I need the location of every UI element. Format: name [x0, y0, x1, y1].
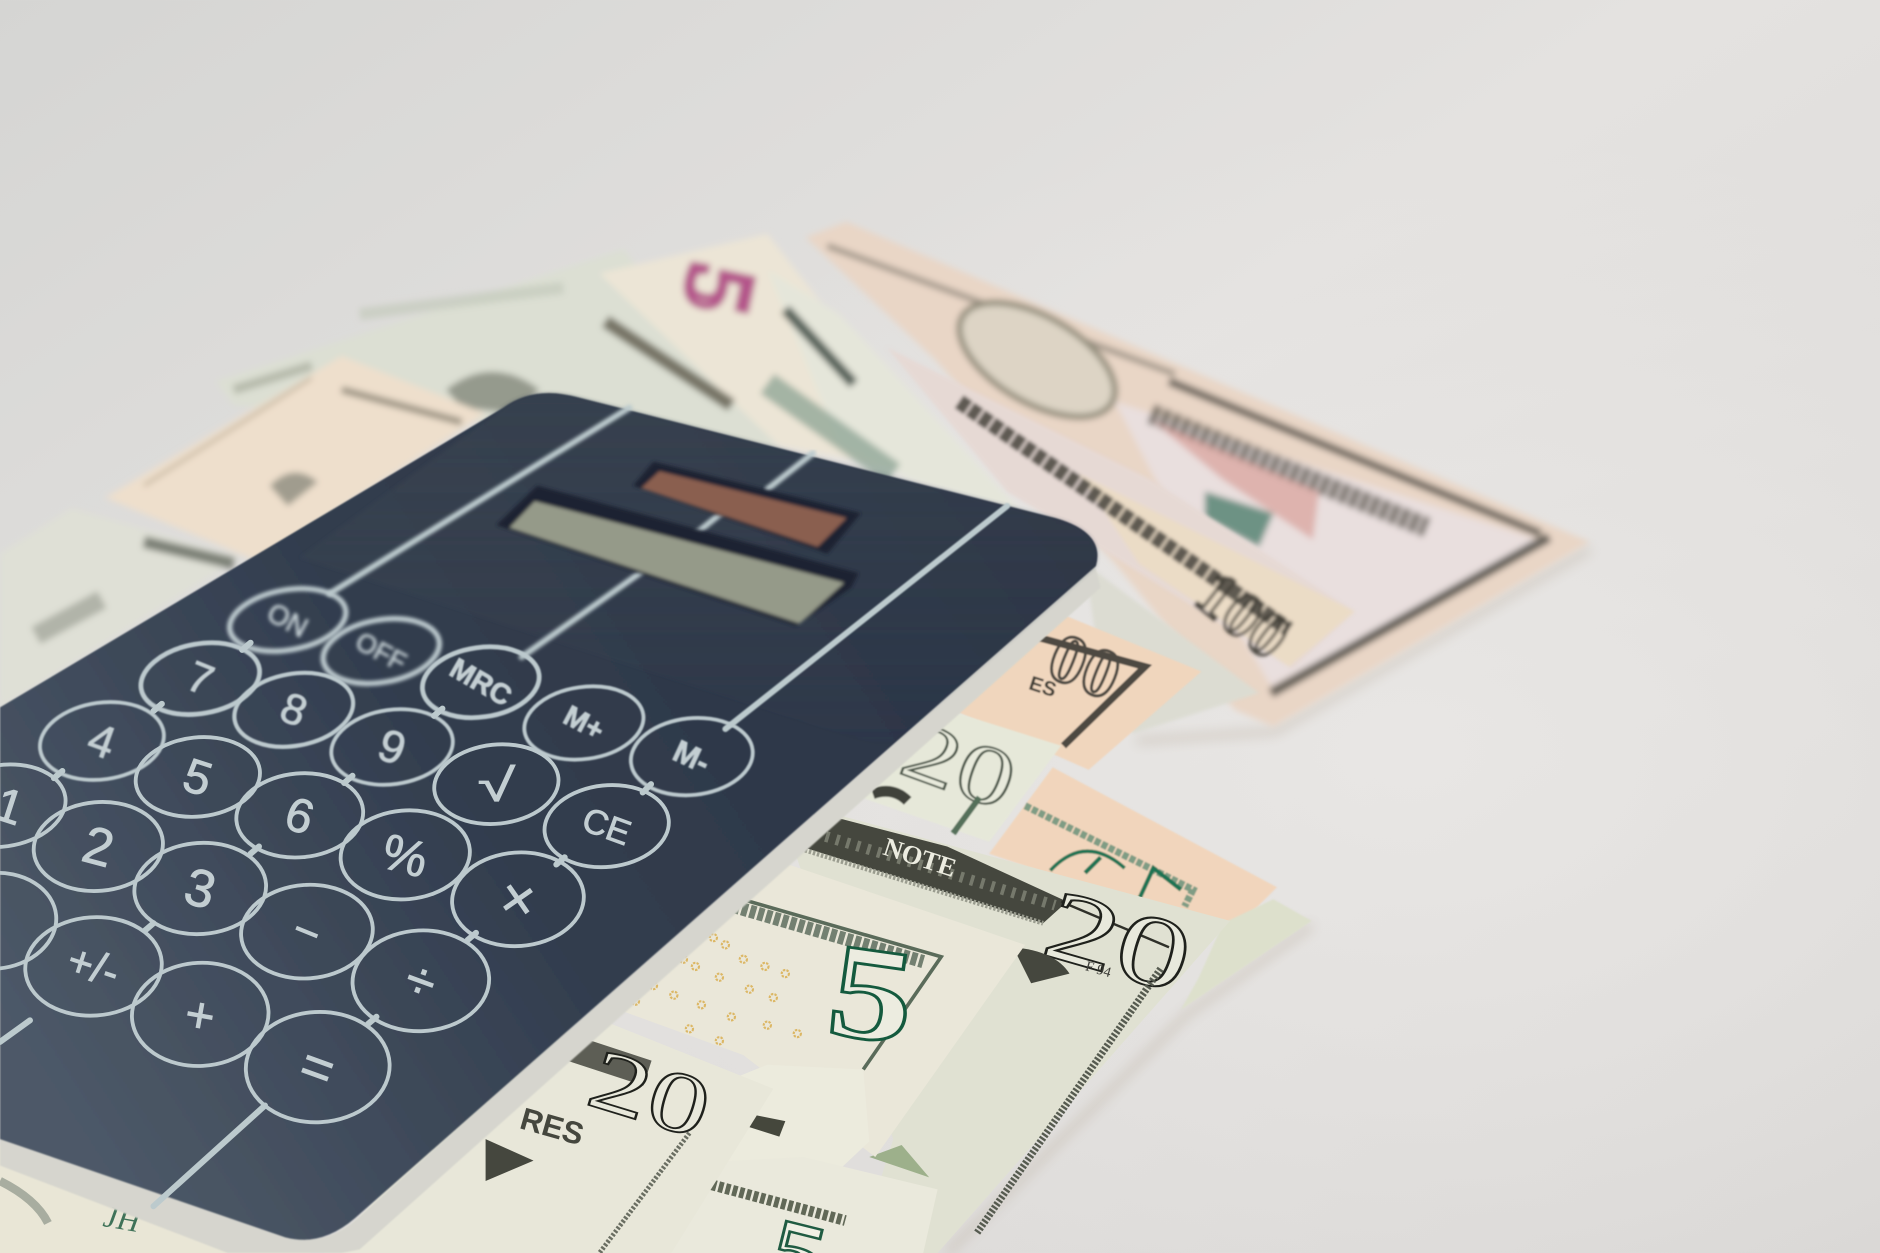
key minus	[238, 880, 376, 983]
key 9: 9	[371, 719, 413, 775]
bill: five dollar bill	[611, 857, 1025, 1157]
bill: cream corner under the bottom twenty	[719, 1065, 869, 1181]
bill: cream bill with pink five	[599, 234, 959, 480]
key M-	[627, 712, 757, 801]
bill: far green bill	[216, 249, 779, 450]
numeral 20: 20	[578, 1030, 722, 1157]
bill: bottom left bill under the calculator: JH	[101, 1198, 144, 1239]
key equals: =	[292, 1033, 343, 1102]
key percent	[337, 805, 474, 905]
bill: lower five dollar bill	[635, 1115, 938, 1253]
bill: peach hundred beside the calculator: 00	[1038, 618, 1131, 716]
key ON	[225, 580, 351, 660]
key plus minus: +/-	[61, 936, 125, 998]
bill: green bill peeking at right	[1181, 899, 1312, 1010]
key 2: 2	[76, 815, 120, 879]
large numeral 5: 5	[820, 914, 924, 1073]
key 7	[135, 634, 265, 723]
bill: far left green bill	[0, 508, 240, 707]
shadow under the bills	[947, 549, 1590, 1253]
far bills: blurred back of the fan	[0, 222, 1590, 727]
key 3	[131, 838, 269, 939]
key MRC	[418, 640, 544, 725]
bill: green twenty beside the calculator	[861, 702, 1061, 842]
key percent: %	[376, 822, 434, 889]
LCD display	[496, 486, 858, 626]
bill: bottom twenty dollar bill	[324, 1019, 773, 1253]
bill: cream bill with pink five: 5	[663, 255, 774, 322]
calculator body	[0, 393, 1097, 1240]
bill: mid green five with engraving	[767, 270, 1019, 510]
bill: pink and dark hundred under the calculator: 100	[1182, 557, 1303, 673]
key plus minus	[22, 913, 165, 1020]
key divide: ÷	[397, 949, 444, 1014]
key plus	[129, 959, 271, 1069]
key OFF	[318, 610, 445, 692]
key blank	[0, 868, 60, 974]
key divide	[350, 927, 492, 1035]
yellow security dots	[632, 934, 801, 1044]
bill: peach bill with green engraving	[989, 767, 1277, 935]
bill: bottom left bill under the calculator	[0, 1145, 312, 1253]
engraved dark band	[801, 818, 1067, 923]
key M+: M+	[558, 700, 609, 747]
large numeral 20: 20	[1033, 868, 1204, 1015]
key 1	[0, 757, 71, 855]
bill: pink and dark hundred under the calculator	[887, 348, 1355, 734]
key MRC: MRC	[444, 653, 517, 713]
key 7: 7	[180, 652, 220, 706]
key 6	[233, 768, 367, 863]
key minus: −	[285, 903, 329, 960]
key 6: 6	[278, 787, 320, 846]
key ON: ON	[262, 597, 313, 643]
key CE: CE	[577, 801, 636, 853]
bill: peach hundred beside the calculator: ES	[1026, 673, 1059, 702]
key 5: 5	[177, 749, 218, 808]
key equals	[243, 1008, 392, 1126]
solar panel	[633, 462, 861, 554]
bill: green twenty beside the calculator: 20	[890, 702, 1028, 828]
bill: peach hundred beside the calculator	[947, 614, 1201, 770]
key M+	[520, 679, 648, 767]
bill: bottom twenty dollar bill: RES	[516, 1101, 588, 1152]
key 4	[35, 694, 169, 788]
key multiply	[449, 848, 587, 951]
calculator white side edge	[0, 561, 1101, 1253]
bill: far left peach bill	[106, 356, 486, 561]
key multiply: ×	[496, 865, 540, 934]
key 8: 8	[273, 683, 314, 737]
key 4: 4	[81, 713, 123, 769]
key square root: √	[478, 760, 515, 811]
bill: peach fifty at the back right	[806, 222, 1590, 727]
key 5	[132, 731, 264, 823]
bill: large twenty with NOTE band: F 94	[1083, 958, 1113, 981]
key CE	[540, 779, 673, 873]
bill: large twenty with NOTE band	[791, 815, 1230, 1253]
printed circuit lines	[0, 408, 1007, 1206]
keypad	[0, 580, 757, 1126]
key 3: 3	[178, 857, 222, 921]
key OFF: OFF	[351, 626, 411, 677]
key 8	[228, 664, 359, 756]
small note wording: NOTE	[880, 832, 960, 883]
key plus: +	[181, 984, 220, 1045]
calculator	[0, 393, 1101, 1253]
key M-: M-	[668, 733, 716, 780]
key 2	[30, 797, 167, 896]
key square root	[430, 738, 563, 830]
key 9	[326, 702, 458, 792]
